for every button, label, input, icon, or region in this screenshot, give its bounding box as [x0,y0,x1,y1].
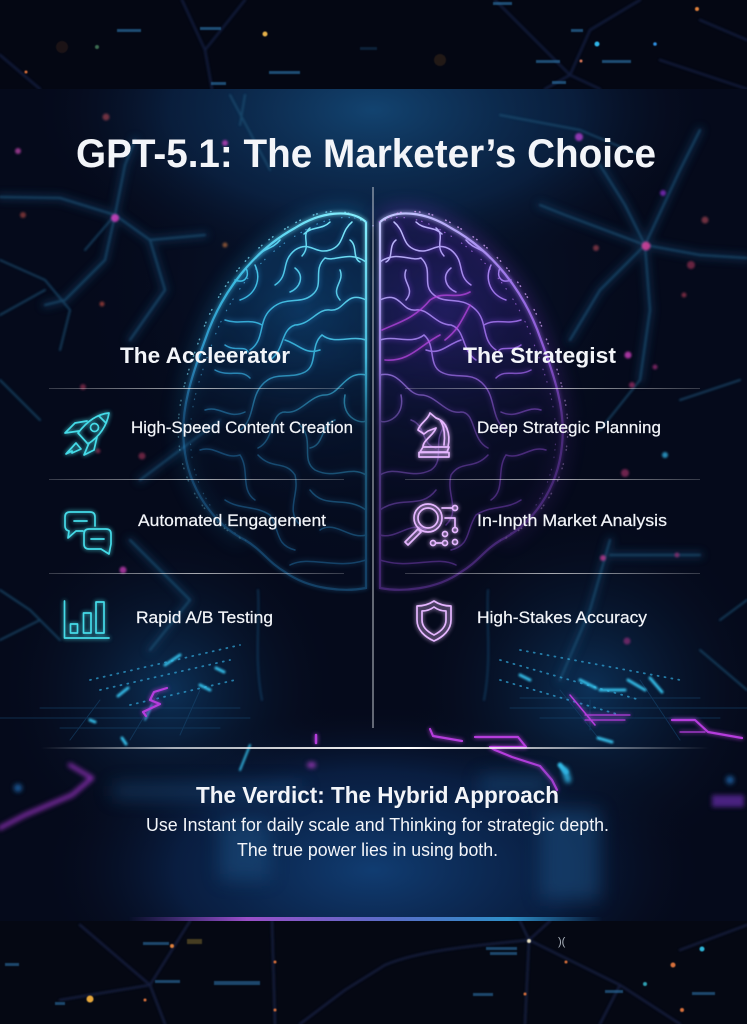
item: High-Speed Content Creation: High-Speed Content Creation [131,419,353,437]
right hemisphere (purple) [373,211,568,590]
circuit board floor [0,590,747,900]
bright magenta folds [382,292,470,360]
bottom network strip [0,921,747,1024]
title: GPT-5.1: The Marketer’s Choice [76,132,656,176]
verdict body: The true power lies in using both. [237,840,498,860]
icon: bar chart [64,601,109,638]
gradient accent bar [128,917,603,921]
column: The Strategist [405,343,700,641]
center vertical divider [372,187,374,728]
verdict body: Use Instant for daily scale and Thinking for strategic depth. [146,815,609,835]
heading: The Strategist: The Strategist [463,343,617,368]
icon: chat bubbles [65,512,111,554]
icon: shield [417,601,451,641]
left hemisphere (cyan) [178,211,373,590]
neuron network background [0,95,747,690]
top network strip [0,0,747,89]
icon: chess knight [418,413,449,457]
icon: magnifier with nodes [405,504,458,546]
heading: The Accleerator: The Accleerator [120,343,290,368]
verdict block [146,782,609,860]
bottom network strip: )( [558,936,566,948]
verdict body [146,815,609,860]
icon: rocket [65,413,109,455]
column: The Accelerator [49,343,353,638]
item: Rapid A/B Testing: Rapid A/B Testing [136,609,273,627]
item: High-Stakes Accuracy: High-Stakes Accuracy [477,609,648,627]
verdict heading: The Verdict: The Hybrid Approach [196,782,559,808]
item: In-Inpth Market Analysis: In-Inpth Market Analysis [477,512,667,530]
brain illustration [178,211,568,590]
item: Deep Strategic Planning: Deep Strategic Planning [477,419,661,437]
item: Automated Engagement: Automated Engagement [138,512,326,530]
